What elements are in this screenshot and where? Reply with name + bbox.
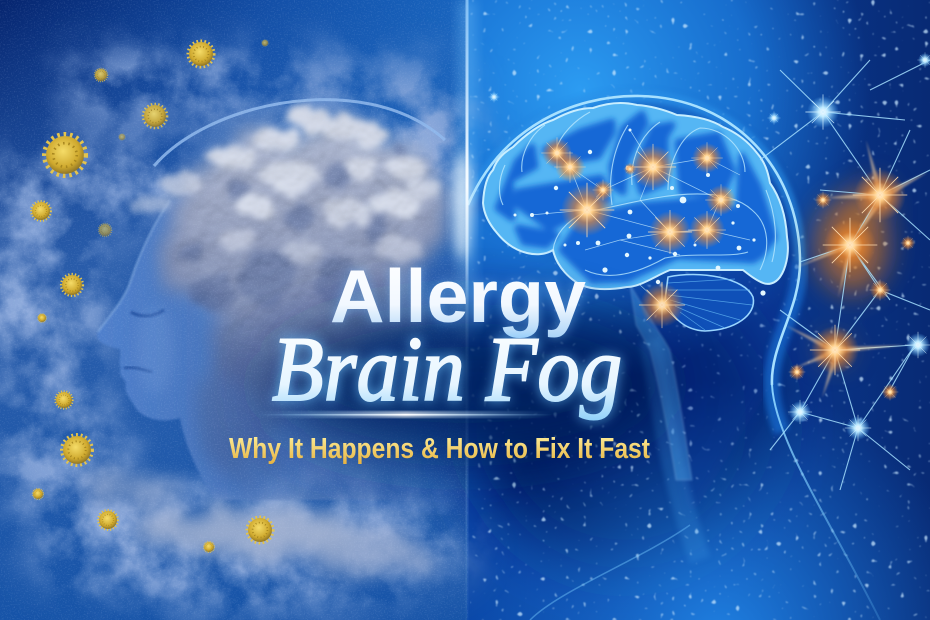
node [648, 210, 692, 254]
node [624, 163, 636, 175]
star field: fine specks [470, 0, 930, 620]
neuron [853, 168, 907, 222]
closed eye and face shading [124, 305, 173, 395]
neuron [905, 332, 930, 358]
pollen 13 [32, 488, 44, 500]
neuron [845, 415, 871, 441]
left face profile [97, 180, 430, 500]
neuron [823, 218, 877, 272]
neuron [815, 192, 831, 208]
node [592, 180, 614, 200]
right background: starry blue [467, 0, 930, 620]
pollen 2 [143, 104, 167, 128]
neuron [870, 280, 890, 300]
pollen 7 [62, 435, 92, 465]
right orange neurons [789, 168, 915, 400]
fog grain [0, 0, 468, 620]
node [630, 144, 676, 190]
neuron [789, 364, 805, 380]
neuron [882, 384, 898, 400]
cerebellum [665, 274, 753, 331]
pollen 14 [204, 542, 214, 552]
node [705, 184, 737, 216]
fog clouds: lower cloud [80, 474, 435, 579]
neuron [810, 325, 860, 375]
pollen 15 [262, 40, 268, 46]
neuron [901, 236, 915, 250]
brain gyri [498, 114, 774, 280]
title: Brain Fog: Brain Fog [272, 318, 622, 420]
node [560, 183, 614, 237]
neuron [917, 52, 930, 68]
dark backdrop behind title [270, 313, 660, 457]
tapered neuron dendrites [785, 140, 928, 398]
neuron [788, 400, 812, 424]
pollen 4 [31, 201, 51, 221]
pollen 16 [119, 134, 125, 140]
pollen 6 [55, 391, 73, 409]
neuron [805, 94, 841, 130]
pollen 8 [98, 510, 118, 530]
node [691, 142, 723, 174]
orange glow behind neurons [816, 182, 888, 362]
pollen 10 [94, 68, 108, 82]
brain fold highlights [499, 112, 775, 275]
subtitle: Why It Happens & How to Fix It Fast [229, 433, 650, 465]
brain [483, 103, 788, 305]
neural links [530, 130, 750, 305]
node [554, 151, 586, 183]
fog clouds: dark gaps between puffs [178, 142, 408, 312]
node [541, 137, 573, 169]
title: Allergy: Allergy [330, 254, 586, 338]
fog clouds: main head cloud base [165, 127, 445, 470]
glowing underline [258, 412, 553, 417]
pollen 5 [61, 274, 83, 296]
pollen 9 [247, 517, 273, 543]
pollen 1 [188, 41, 214, 67]
brain orange nodes [541, 137, 737, 328]
title: Allergy: Allergy [330, 254, 586, 338]
central vertical light beam [453, 0, 476, 620]
fog clouds: main head cloud texture [170, 115, 440, 360]
node [688, 211, 726, 249]
fog clouds: light puffs [126, 105, 443, 263]
left background: foggy blue [0, 0, 468, 620]
right head silhouette [468, 96, 880, 620]
title: Brain Fog: Brain Fog [272, 318, 622, 420]
right neural network lines [760, 60, 930, 490]
pollen particles [31, 40, 273, 552]
brain sparkle dots [514, 128, 766, 296]
pollen 12 [38, 314, 46, 322]
right white neurons [488, 52, 930, 441]
neuron [488, 92, 500, 102]
pollen 11 [98, 223, 112, 237]
outer fog haze [0, 49, 475, 610]
brainstem [630, 285, 692, 480]
neuron [767, 111, 781, 125]
node [639, 282, 685, 328]
pollen 3 [44, 134, 86, 176]
left head arc [154, 100, 445, 166]
